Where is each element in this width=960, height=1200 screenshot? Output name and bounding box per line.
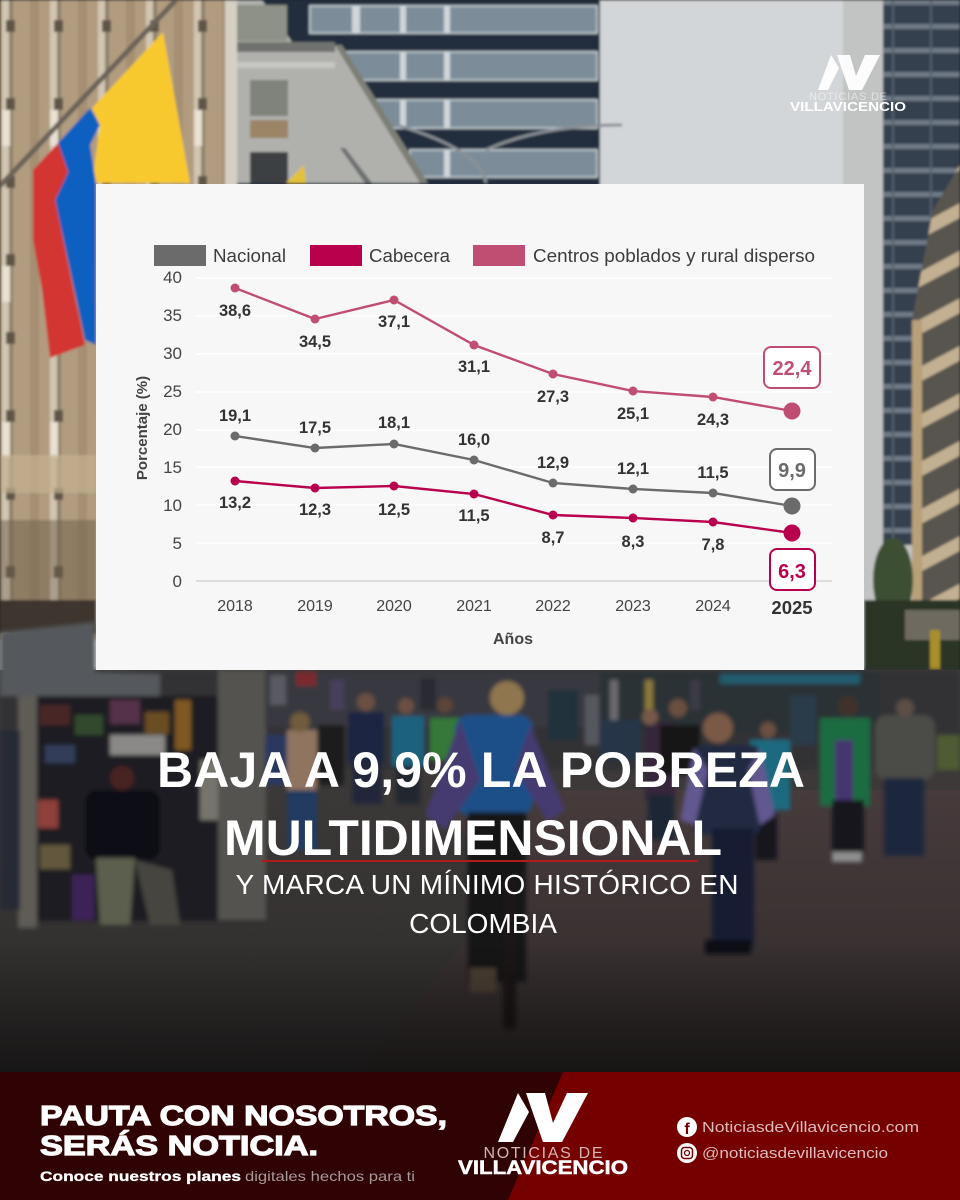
line: centros poblados y rural disperso bbox=[230, 284, 800, 420]
callout: 6,3 bbox=[770, 549, 815, 590]
data value labels: 8,7 bbox=[542, 529, 564, 547]
callout: 22,4 bbox=[764, 347, 820, 388]
headline line 1: BAJA A 9,9% LA POBREZA bbox=[157, 742, 805, 798]
y axis and grid: 15 bbox=[163, 458, 182, 477]
callout: 9,9 bbox=[770, 449, 815, 490]
x axis: 2023 bbox=[615, 598, 651, 615]
data value labels: 7,8 bbox=[702, 536, 724, 554]
lower photo: pedestrians and kiosk bbox=[0, 622, 960, 1030]
y axis and grid: 30 bbox=[163, 344, 182, 363]
logo mark bbox=[818, 55, 880, 90]
data value labels: 37,1 bbox=[378, 313, 410, 331]
footer slogan: Conoce nuestros planes bbox=[40, 1168, 241, 1184]
headline underline bbox=[262, 860, 698, 862]
data value labels: 27,3 bbox=[537, 388, 569, 406]
x axis: 2019 bbox=[297, 598, 333, 615]
headline line 2: MULTIDIMENSIONAL bbox=[224, 810, 722, 866]
footer slogan: digitales hechos para ti bbox=[245, 1168, 415, 1184]
data value labels: 18,1 bbox=[378, 414, 410, 432]
y axis and grid: Porcentaje (%) bbox=[134, 376, 151, 480]
footer logo bbox=[458, 1093, 628, 1179]
icon: facebook: f bbox=[684, 1121, 690, 1138]
data value labels: 25,1 bbox=[617, 405, 649, 423]
chart legend: Cabecera bbox=[369, 246, 451, 266]
logo text: VILLAVICENCIO bbox=[790, 99, 906, 114]
subheading line 1: Y MARCA UN MÍNIMO HISTÓRICO EN bbox=[236, 869, 738, 900]
data value labels: 16,0 bbox=[458, 431, 490, 449]
facebook address: NoticiasdeVillavicencio.com bbox=[702, 1119, 919, 1136]
x axis: 2022 bbox=[535, 598, 571, 615]
y axis and grid bbox=[134, 268, 832, 591]
chart legend: Centros poblados y rural disperso bbox=[533, 246, 815, 266]
data value labels: 12,5 bbox=[378, 501, 410, 519]
subheading line 2: COLOMBIA bbox=[409, 908, 557, 939]
data value labels: 31,1 bbox=[458, 358, 490, 376]
callout: 6,3: 6,3 bbox=[778, 561, 806, 583]
data value labels: 11,5 bbox=[697, 464, 729, 482]
y axis and grid: 20 bbox=[163, 420, 182, 439]
data value labels: 19,1 bbox=[219, 407, 251, 425]
chart legend: Nacional bbox=[213, 246, 286, 266]
data value labels: 38,6 bbox=[219, 302, 251, 320]
chart legend bbox=[154, 245, 815, 266]
line: cabecera bbox=[230, 476, 800, 542]
callout: 9,9: 9,9 bbox=[778, 460, 806, 482]
x axis: 2025 bbox=[771, 597, 813, 618]
data value labels: 17,5 bbox=[299, 419, 331, 437]
footer slogan: PAUTA CON NOSOTROS, bbox=[40, 1100, 447, 1131]
data value labels: 12,1 bbox=[617, 460, 649, 478]
footer banner bbox=[0, 1072, 960, 1200]
x axis bbox=[217, 597, 813, 648]
lower photo: pavement bbox=[0, 670, 960, 1072]
data value labels: 8,3 bbox=[622, 533, 644, 551]
y axis and grid: 40 bbox=[163, 268, 182, 287]
y axis and grid: 10 bbox=[163, 496, 182, 515]
data value labels: 12,9 bbox=[537, 454, 569, 472]
bottom darkening overlay bbox=[0, 940, 960, 1072]
footer logo: VILLAVICENCIO bbox=[458, 1158, 628, 1179]
top logo bbox=[790, 55, 906, 114]
logo text bbox=[790, 91, 906, 114]
data value labels: 11,5 bbox=[458, 507, 490, 525]
x axis: 2021 bbox=[456, 598, 492, 615]
instagram handle: @noticiasdevillavicencio bbox=[702, 1145, 888, 1162]
upper photo: buildings and flag bbox=[0, 0, 960, 680]
footer slogan: SERÁS NOTICIA. bbox=[40, 1130, 318, 1161]
x axis: Años bbox=[493, 631, 533, 648]
y axis and grid: 25 bbox=[163, 382, 182, 401]
chart panel bbox=[96, 184, 864, 670]
data value labels: 12,3 bbox=[299, 501, 331, 519]
icon: facebook bbox=[677, 1117, 697, 1138]
x axis: 2024 bbox=[695, 598, 731, 615]
icon: instagram bbox=[677, 1143, 697, 1163]
y axis and grid: 0 bbox=[173, 572, 182, 591]
data value labels: 34,5 bbox=[299, 333, 331, 351]
headline bbox=[157, 742, 805, 939]
data value labels bbox=[219, 302, 729, 554]
x axis: 2018 bbox=[217, 598, 253, 615]
callout: 22,4: 22,4 bbox=[773, 358, 812, 380]
y axis and grid: 5 bbox=[173, 534, 182, 553]
data value labels: 13,2 bbox=[219, 494, 251, 512]
y axis and grid: 35 bbox=[163, 306, 182, 325]
social links bbox=[677, 1117, 919, 1163]
footer logo: NOTICIAS DE bbox=[484, 1145, 602, 1162]
logo text: NOTICIAS DE bbox=[809, 91, 887, 103]
line: nacional bbox=[230, 432, 800, 514]
x axis: 2020 bbox=[376, 598, 412, 615]
footer slogan bbox=[40, 1100, 447, 1184]
data value labels: 24,3 bbox=[697, 411, 729, 429]
